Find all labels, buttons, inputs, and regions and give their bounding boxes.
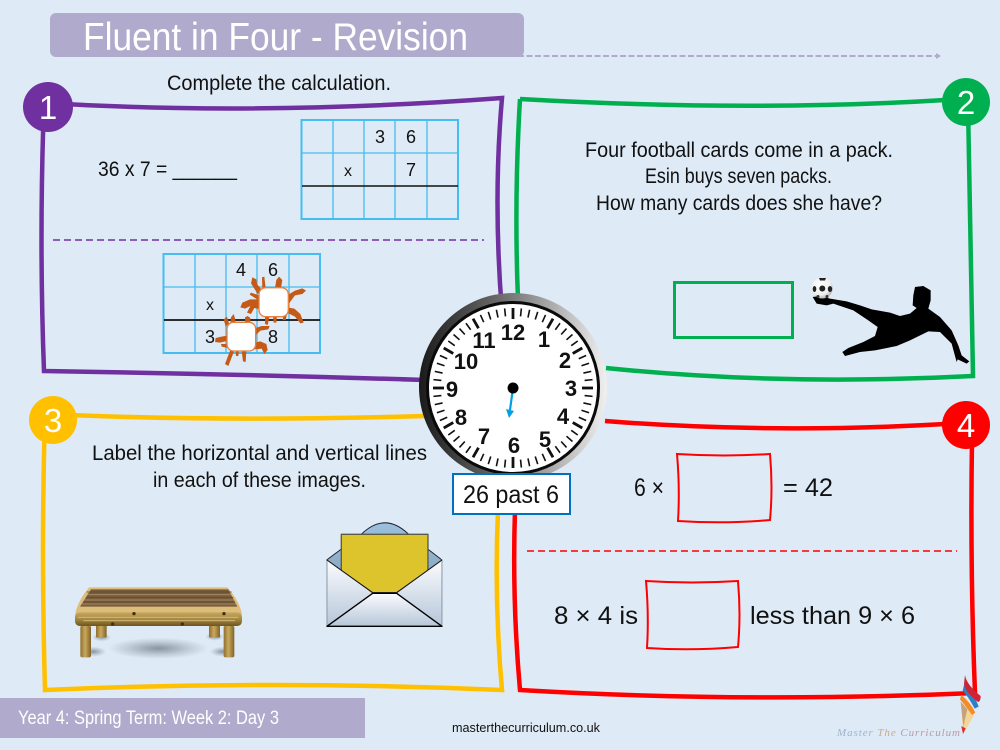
panel 3 instruction [92, 442, 427, 492]
panel 4: missing numbers [514, 401, 990, 697]
panel 1 top grid: 3 [375, 127, 385, 147]
title bar: Fluent in Four - Revision [83, 16, 468, 59]
panel 2 question text: How many cards does she have? [596, 192, 882, 215]
clock numerals: 1 [538, 327, 550, 352]
clock numerals [446, 320, 577, 458]
clock numerals: 5 [539, 427, 551, 452]
number badge 1 [23, 82, 73, 132]
panel 4 border [514, 421, 975, 697]
panel 1 question: 36 x 7 = ______ [98, 158, 237, 181]
clock numerals: 4 [557, 404, 570, 429]
number badge 3 [29, 396, 77, 444]
panel 2 question text [585, 139, 893, 215]
clock numerals: 7 [478, 424, 490, 449]
clock hand [506, 382, 518, 418]
number badge 4: 4 [957, 407, 975, 444]
clock numerals: 10 [454, 349, 478, 374]
panel 1 worked grid: x [206, 297, 214, 314]
panel 3 border [43, 414, 502, 690]
clock tick marks [433, 308, 593, 468]
panel 3: horizontal and vertical lines [29, 396, 502, 690]
icon: wooden table [75, 587, 242, 659]
number badge 4 [942, 401, 990, 449]
clock time label [453, 474, 570, 514]
panel 1 worked grid: 8 [268, 327, 278, 347]
panel 4 second equation: 8 × 4 is [554, 602, 638, 630]
panel 1 worked grid: 4 [236, 260, 246, 280]
icon: paint splats over missing digits [215, 277, 306, 366]
panel 2 question text: Esin buys seven packs. [645, 165, 832, 188]
number badge 3: 3 [44, 402, 62, 439]
clock numerals: 6 [508, 433, 520, 458]
panel 2 answer box [674, 282, 792, 338]
panel 1 worked grid [163, 254, 320, 353]
panel 4 first equation: = 42 [783, 474, 833, 502]
clock [419, 293, 607, 481]
icon: football [812, 278, 833, 298]
clock time label: 26 past 6 [463, 481, 559, 509]
panel 1: written multiplication [23, 72, 502, 380]
clock numerals: 9 [446, 377, 458, 402]
icon: footballer silhouette [813, 286, 969, 364]
clock face [419, 293, 607, 481]
panel 2: football cards [516, 78, 990, 380]
panel 1 worked grid: 3 [205, 327, 215, 347]
clock numerals: 12 [501, 320, 525, 345]
footer bar [0, 698, 365, 738]
clock numerals: 11 [472, 328, 496, 353]
panel 4 first equation: 6 × [634, 474, 664, 502]
panel 1 instruction: Complete the calculation. [167, 72, 391, 95]
clock numerals: 8 [455, 405, 467, 430]
panel 2 border [516, 99, 973, 380]
title dotted arrow [467, 53, 941, 59]
panel 4 first equation [634, 454, 833, 522]
panel 3 instruction: in each of these images. [153, 469, 366, 492]
panel 1 top grid: x [344, 163, 352, 180]
panel 4 second equation: less than 9 × 6 [750, 602, 915, 630]
panel 1 border [42, 98, 502, 380]
panel 1 top grid: 7 [406, 160, 416, 180]
number badge 2: 2 [957, 84, 975, 121]
logo wordmark: Master The Curriculum [836, 727, 960, 739]
clock numerals: 2 [559, 348, 571, 373]
clock numerals: 3 [565, 376, 577, 401]
icon: pencil flame logo [960, 675, 981, 734]
panel 4 second equation [554, 581, 915, 649]
footer bar: Year 4: Spring Term: Week 2: Day 3 [18, 708, 279, 729]
icon: open envelope with yellow letter [327, 523, 442, 626]
number badge 2 [942, 78, 990, 126]
panel 1 top grid [301, 120, 458, 219]
website address: masterthecurriculum.co.uk [452, 720, 600, 735]
panel 3 instruction: Label the horizontal and vertical lines [92, 442, 427, 465]
panel 1 worked grid: 6 [268, 260, 278, 280]
panel 2 question text: Four football cards come in a pack. [585, 139, 893, 162]
number badge 1: 1 [39, 89, 57, 126]
panel 1 top grid: 6 [406, 127, 416, 147]
